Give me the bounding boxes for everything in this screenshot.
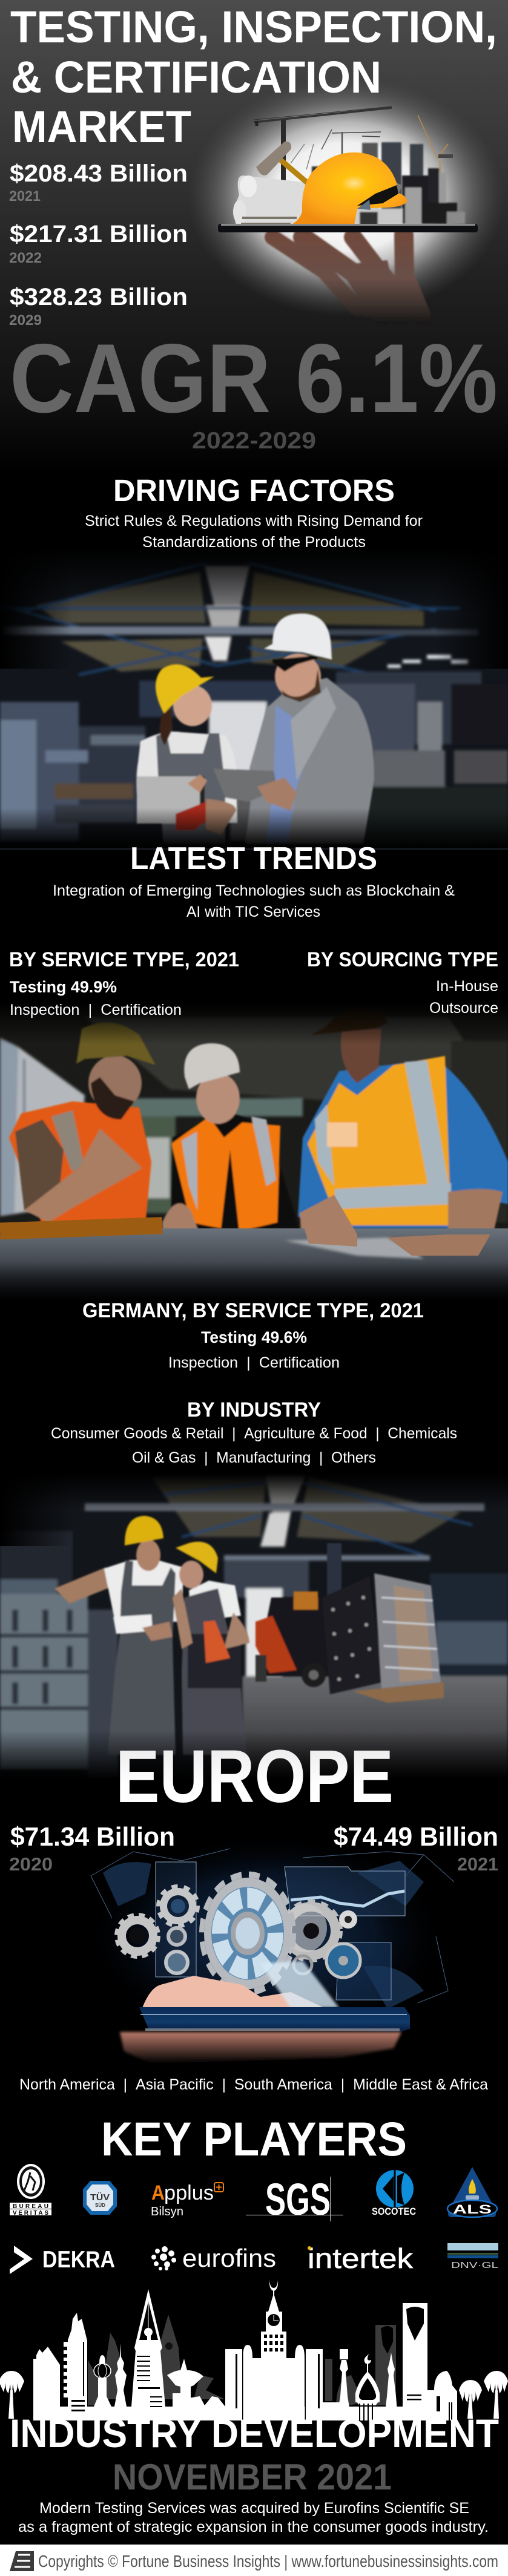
logo: dekra: DEKRA xyxy=(42,2247,115,2273)
logo: applus bilsyn: A xyxy=(151,2181,165,2204)
driving factors description: Standardizations of the Products xyxy=(142,534,366,551)
hand top xyxy=(142,1976,324,2008)
logo: sgs: SGS xyxy=(265,2174,331,2224)
logo: als: ALS xyxy=(453,2203,492,2217)
gear: far right xyxy=(282,1902,340,1960)
world map dots and network xyxy=(91,1849,454,2003)
photo: three engineers at a table xyxy=(0,1002,508,1302)
photo: workers and forklift in warehouse xyxy=(0,1473,508,1785)
heading: key players: KEY PLAYERS xyxy=(101,2112,407,2166)
by sourcing type xyxy=(307,948,498,1017)
photo: engineers in factory hall xyxy=(0,548,508,850)
logo: applus bilsyn xyxy=(151,2181,223,2218)
other regions list: North America | Asia Pacific | South America | Middle East & Africa xyxy=(19,2076,488,2093)
hand xyxy=(272,235,427,321)
by sourcing type: Outsource xyxy=(429,1000,498,1017)
stat: 2029 market value: 2029 xyxy=(9,312,42,329)
left stacks xyxy=(0,702,79,841)
development description: as a fragment of strategic expansion in the consumer goods industry. xyxy=(18,2519,489,2535)
by service type 2021 xyxy=(9,948,239,1018)
back xyxy=(224,1561,309,1598)
illustration: gears rising from phone in hand xyxy=(85,1834,454,2063)
logo: socotec: SOCOTEC xyxy=(372,2206,416,2217)
by industry xyxy=(51,1398,457,1466)
driving factors description xyxy=(85,513,423,551)
by sourcing type: In-House xyxy=(436,978,498,995)
logo: socotec xyxy=(372,2170,416,2217)
gear: top left xyxy=(159,1887,197,1925)
panel: europe xyxy=(0,1473,508,2093)
logo: tuv sud: SÜD xyxy=(95,2203,105,2208)
gear: lower left stack xyxy=(168,1928,185,1945)
logo: dekra xyxy=(10,2246,115,2274)
title: TESTING, INSPECTION, xyxy=(10,2,497,52)
woman xyxy=(189,1581,241,1622)
right stacks xyxy=(336,672,481,744)
panel: segmentation with workers photo xyxy=(0,948,508,1466)
background silhouettes xyxy=(88,2315,396,2408)
stat: europe 2021: $74.49 Billion xyxy=(334,1822,498,1852)
panel: driving factors xyxy=(0,473,508,850)
rolled blueprints xyxy=(233,175,309,226)
stat: 2021 market value: 2021 xyxy=(9,188,41,205)
small gears xyxy=(339,1910,357,1929)
latest trends description xyxy=(53,882,455,920)
ceiling panels xyxy=(36,572,206,623)
panel: industry development xyxy=(0,2280,508,2535)
by industry: Oil & Gas | Manufacturing | Others xyxy=(132,1449,376,1466)
by industry: Consumer Goods & Retail | Agriculture & Food | Chemicals xyxy=(51,1425,457,1442)
ceiling xyxy=(89,1018,464,1101)
logo: bureau veritas: VERITAS xyxy=(13,2210,48,2217)
title: MARKET xyxy=(12,102,191,152)
logo: applus bilsyn: Bilsyn xyxy=(151,2205,183,2218)
hard hat xyxy=(289,152,407,226)
panel: key players xyxy=(10,2112,498,2274)
black wheels load xyxy=(322,1576,383,1694)
icon: fortune business insights logo xyxy=(10,2551,34,2571)
development description xyxy=(18,2500,489,2535)
CAGR period: 2022-2029 xyxy=(192,428,316,454)
blue beams xyxy=(0,563,460,675)
germany by service type xyxy=(82,1299,424,1371)
heading: europe: EUROPE xyxy=(116,1735,394,1818)
window xyxy=(0,1038,85,1216)
icon: hard hat on tablet held by hand with city and cranes xyxy=(188,77,505,321)
hammer xyxy=(256,142,309,185)
panel: header with market overview xyxy=(0,0,508,472)
stat: 2029 market value: $328.23 Billion xyxy=(10,284,188,310)
by service type 2021: BY SERVICE TYPE, 2021 xyxy=(9,948,239,971)
right man xyxy=(298,1059,508,1228)
stat: 2021 market value xyxy=(9,160,188,205)
logo: tuv sud xyxy=(83,2181,117,2215)
development description: Modern Testing Services was acquired by Eurofins Scientific SE xyxy=(39,2500,469,2517)
palms xyxy=(0,2371,24,2419)
stat: 2022 market value xyxy=(9,221,188,266)
white silhouettes xyxy=(0,2280,508,2420)
forklift xyxy=(265,1596,329,1677)
man hand xyxy=(257,778,297,811)
title xyxy=(10,2,497,152)
stat: europe 2021: 2021 xyxy=(457,1853,498,1875)
by service type 2021: Inspection | Certification xyxy=(10,1001,182,1018)
logo: bureau veritas: BUREAU xyxy=(13,2203,48,2210)
heading: latest trends: LATEST TRENDS xyxy=(130,841,377,876)
woman xyxy=(136,732,237,823)
driving factors description: Strict Rules & Regulations with Rising Demand for xyxy=(85,513,423,529)
man xyxy=(54,1567,115,1604)
stat: europe 2020 xyxy=(9,1822,175,1875)
logo: eurofins: eurofins xyxy=(182,2244,276,2272)
city buildings xyxy=(312,142,465,225)
right shelves xyxy=(430,1573,508,1676)
stat: europe 2020: 2020 xyxy=(9,1853,53,1875)
logo: intertek: intertek xyxy=(308,2243,414,2274)
header gradient background xyxy=(0,0,508,472)
germany by service type: Testing 49.6% xyxy=(201,1328,307,1346)
pallet xyxy=(353,1682,444,1703)
left man xyxy=(9,1101,151,1225)
stat: 2021 market value: $208.43 Billion xyxy=(10,160,188,187)
by service type 2021: Testing 49.9% xyxy=(10,978,117,996)
title: & CERTIFICATION xyxy=(11,52,381,102)
stat: europe 2020: $71.34 Billion xyxy=(10,1822,175,1852)
latest trends description: AI with TIC Services xyxy=(186,903,320,920)
man xyxy=(245,678,374,844)
gear: lower right xyxy=(326,1944,360,1978)
panels xyxy=(156,1862,196,1977)
logo: als xyxy=(447,2167,497,2217)
black cutouts xyxy=(71,2301,452,2420)
lights right xyxy=(388,655,468,668)
heading: driving factors: DRIVING FACTORS xyxy=(113,473,395,508)
gear: small left xyxy=(117,1915,158,1956)
latest trends description: Integration of Emerging Technologies such as Blockchain & xyxy=(53,882,455,899)
gear: big center xyxy=(202,1875,294,1992)
panel: footer xyxy=(0,2545,508,2576)
logo: dnv gl: DNV·GL xyxy=(451,2260,498,2270)
rack xyxy=(374,1573,441,1688)
table xyxy=(0,1228,508,1286)
germany by service type: Inspection | Certification xyxy=(168,1354,340,1371)
logo: applus bilsyn: pplus xyxy=(164,2181,214,2204)
phone xyxy=(139,2007,410,2032)
stat: europe 2021 xyxy=(334,1822,498,1875)
germany by service type: GERMANY, BY SERVICE TYPE, 2021 xyxy=(82,1299,424,1322)
illustration: city skyline xyxy=(0,2280,508,2420)
by sourcing type: BY SOURCING TYPE xyxy=(307,948,498,971)
stat: 2022 market value: $217.31 Billion xyxy=(10,221,188,247)
back wall xyxy=(139,681,285,717)
left shelves xyxy=(0,1531,73,1604)
skylight xyxy=(205,566,249,611)
panel: latest trends xyxy=(53,841,455,920)
cross truss xyxy=(0,626,321,635)
logo: tuv sud: TÜV xyxy=(90,2192,110,2203)
stat: 2029 market value xyxy=(9,284,188,329)
by industry: BY INDUSTRY xyxy=(187,1398,321,1421)
logo: bureau veritas xyxy=(10,2164,51,2217)
crane jib xyxy=(254,107,453,224)
date: november 2021: NOVEMBER 2021 xyxy=(113,2457,392,2497)
tablet xyxy=(213,769,277,802)
floor xyxy=(242,1673,508,1785)
ceiling xyxy=(151,1476,266,1537)
logo: sgs xyxy=(246,2174,343,2224)
fingers under phone xyxy=(120,2032,401,2063)
tablet xyxy=(218,224,478,232)
logo: dnv gl xyxy=(447,2243,498,2270)
middle man xyxy=(171,1113,300,1228)
stat: 2022 market value: 2022 xyxy=(9,250,42,266)
